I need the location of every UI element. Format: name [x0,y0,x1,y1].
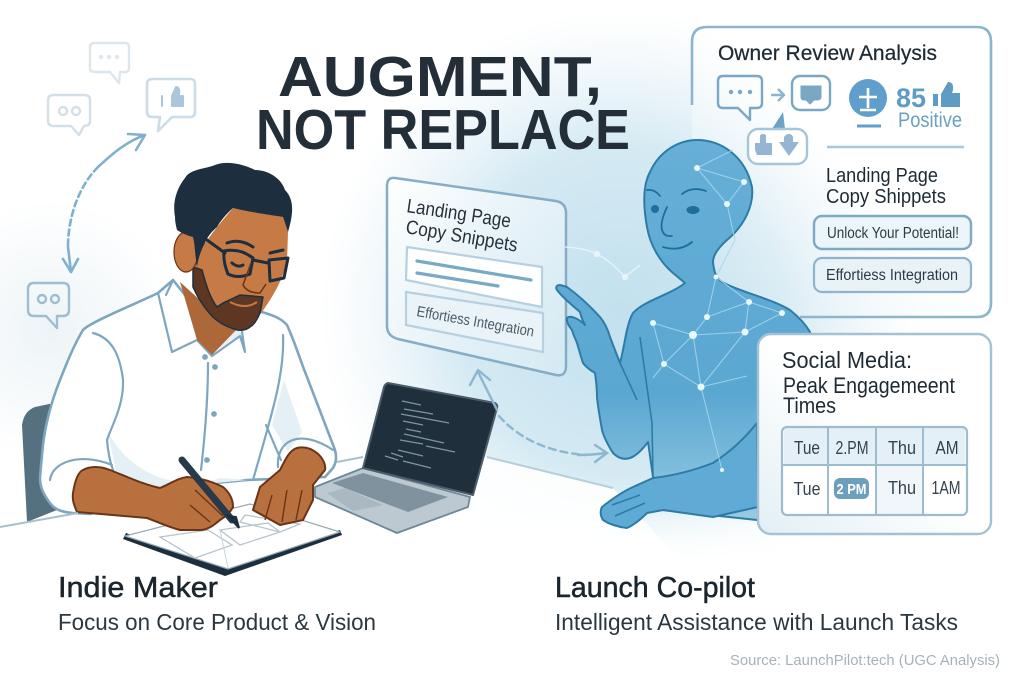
icon: thumbs up bubble [147,79,195,131]
laptop [315,383,497,533]
button: unlock your potential [814,216,971,249]
panel heading: Social Media: [782,347,912,373]
notebook [123,504,342,576]
panel heading: Times [783,393,836,418]
snippet box: effortless integration [406,292,543,352]
schedule table: Thu [888,438,916,458]
icon: faint dots bubble [90,43,129,83]
face details [647,189,706,249]
neural network nodes [650,165,785,472]
schedule table: Tue [794,438,820,458]
pen [182,460,232,520]
co-pilot body silhouette [556,140,815,520]
schedule table: Tue [794,479,820,499]
icon: score badge [849,79,887,126]
highlighted time [834,478,869,499]
nose and mouth [243,263,266,293]
connector dots from panel [565,247,640,280]
chair [22,403,57,522]
laptop base [315,468,470,533]
heading: landing page: Landing Page [826,164,938,187]
lower arm and hand [601,423,758,528]
button: effortless integration [814,258,971,292]
title: AUGMENT, [278,45,602,109]
neural network lines [653,150,782,470]
schedule table: Thu [888,478,916,498]
heading: landing page [826,164,946,208]
left hand and forearm [73,467,233,530]
caption: indie maker [58,572,376,635]
snippet box with lines [406,247,542,307]
face [193,208,288,330]
panel: social media peak times [758,334,991,534]
neck [180,282,238,355]
score: 85: 85 [896,83,926,113]
highlighted time: 2 PM [836,482,866,498]
shirt shadows [108,322,302,488]
code lines [385,401,455,468]
button: unlock your potential: Unlock Your Potential! [827,225,959,242]
panel: owner review analysis [692,27,991,317]
panel: landing page snippets (tilted) [387,178,566,375]
panel heading: Copy Snippets [404,216,519,257]
button: effortless integration: Effortiess Integration [826,267,958,284]
icon: floating chat bubbles [28,43,195,328]
caption: launch co-pilot: Intelligent Assistance with Launch Tasks [555,609,958,635]
title [256,45,630,162]
desk edge [0,457,363,527]
panel heading: Peak Engagemeent [783,373,955,398]
caption: launch co-pilot [555,572,958,635]
arrow: laptop to panel [470,370,497,410]
schedule table: AM [936,438,958,458]
caption: indie maker: Focus on Core Product & Vision [58,609,376,635]
icon: thumbs up [933,82,960,107]
figure: indie maker [22,163,342,576]
schedule table [782,427,967,515]
arrow: curved feedback loop [63,134,145,272]
icon: eyes bubble [48,95,90,135]
schedule table: 2.PM [836,438,868,458]
shirt folds and collar [50,280,333,480]
panel heading [782,347,955,418]
icon: thumbs bubble [748,112,807,164]
laptop screen [363,383,497,495]
eyes [651,205,700,214]
glasses [207,240,288,281]
panel title: Owner Review Analysis [718,42,937,65]
caption: launch co-pilot: Launch Co-pilot [555,572,755,604]
icon: chat bubble to summary [718,76,830,120]
arrow: laptop to co-pilot [499,416,607,462]
connector line behind panels [487,457,613,488]
figure: AI co-pilot [556,140,815,528]
source note: Source: LaunchPilot:tech (UGC Analysis) [730,652,1000,669]
icon: lower eyes bubble [28,283,69,328]
snippet box: effortless integration: Effortiess Integration [415,303,535,341]
ear [174,232,198,272]
beard [193,267,263,330]
schedule table: 1AM [932,478,960,498]
heading: landing page: Copy Shippets [826,185,946,208]
positive label: Positive [898,109,962,132]
title: NOT REPLACE [256,98,630,162]
divider [827,146,964,148]
right hand [253,447,325,525]
caption: indie maker: Indie Maker [58,572,218,604]
panel heading [404,195,519,257]
panel heading: Landing Page [405,195,512,232]
hair [174,163,292,267]
shirt [40,280,336,514]
